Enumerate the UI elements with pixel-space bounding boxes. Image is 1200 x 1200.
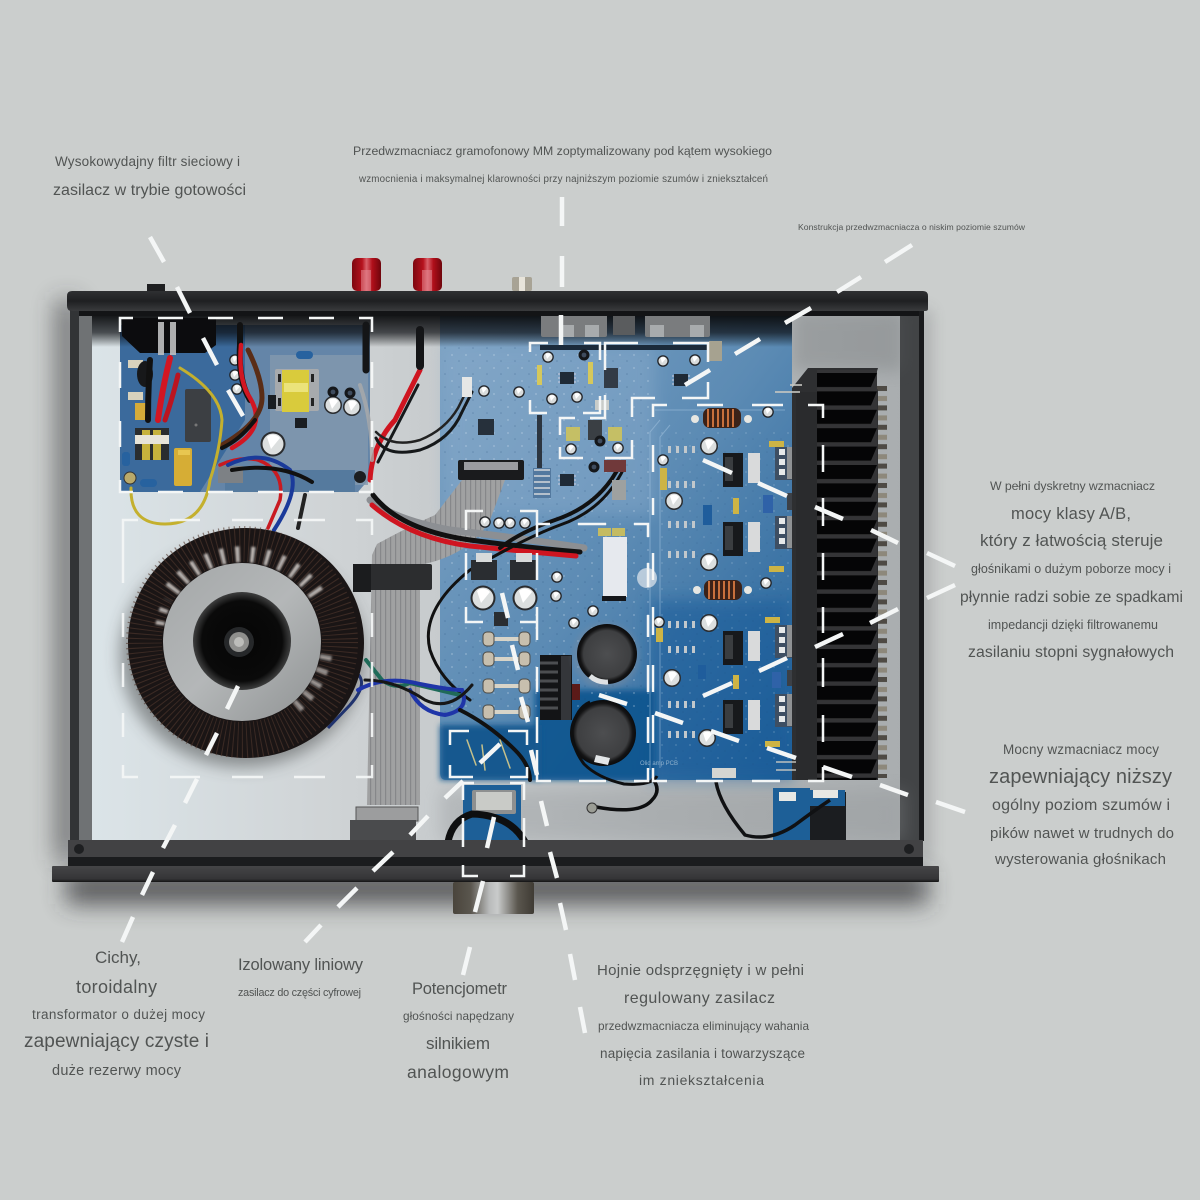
callout: class AB amp: W pełni dyskretny wzmacniacz: [990, 479, 1155, 493]
leader: low noise preamp: [685, 245, 912, 385]
callout: class AB amp: mocy klasy A/B,: [1011, 505, 1131, 523]
main wiring harness: [358, 325, 624, 780]
callout: regulated supply: regulowany zasilacz: [624, 990, 775, 1007]
leader: digital supply: [305, 744, 500, 942]
regulator heatsink: [540, 655, 580, 720]
callout: potentiometer: silnikiem: [426, 1034, 490, 1053]
power PCB components: [122, 318, 366, 487]
chassis frame bars: [52, 291, 939, 882]
callout: power amp: ogólny poziom szumów i: [992, 797, 1170, 814]
power amplifier channels: [653, 406, 800, 778]
callout: power amp: zapewniający niższy: [989, 766, 1172, 788]
small transformer: [135, 428, 169, 460]
power supply section components: [470, 528, 657, 784]
RCA socket: [512, 277, 532, 291]
box: class A/B: [653, 405, 823, 781]
callout: potentiometer: analogowym: [407, 1062, 509, 1082]
callout: power amp: wysterowania głośnikach: [994, 851, 1166, 868]
steel floor: [92, 311, 906, 843]
box: preamp regulated supply: [537, 510, 648, 781]
inductors: [691, 408, 752, 428]
volume knob: [453, 882, 534, 914]
callout: potentiometer: głośności napędzany: [403, 1009, 514, 1023]
power PCB wires: [131, 325, 312, 530]
box: phono right: [560, 343, 708, 458]
rear connectors: [147, 258, 532, 293]
callout: toroidal transformer: zapewniający czyste i: [24, 1031, 209, 1052]
callout: potentiometer: [403, 980, 514, 1082]
right rail: [919, 311, 924, 841]
leader: mains filter: [150, 237, 243, 416]
white block: [603, 537, 627, 597]
toroid centre disc: [163, 563, 321, 721]
callout: mains filter: Wysokowydajny filtr sieciowy i: [55, 154, 240, 169]
lower boards and cables: [448, 778, 846, 842]
leader: phono preamp: [561, 197, 562, 345]
IEC socket: [122, 318, 216, 353]
callout: potentiometer: Potencjometr: [412, 980, 508, 998]
callout: power amp: [989, 742, 1174, 868]
board: standby power supply PCB: [120, 325, 370, 492]
callout: regulated supply: [597, 962, 809, 1088]
rear RCA blocks: [541, 313, 710, 337]
front bar: [68, 840, 923, 865]
callout: digital supply: Izolowany liniowy: [238, 956, 364, 974]
fuses: [483, 632, 530, 719]
main yellow transformer: [275, 369, 319, 412]
callout: class AB amp: głośnikami o dużym poborze mocy i: [971, 562, 1171, 576]
preamp section components: [462, 313, 722, 529]
callout: class AB amp: zasilaniu stopni sygnałowych: [968, 644, 1174, 661]
reservoir capacitors: [570, 623, 657, 784]
relay: [185, 389, 211, 442]
callout: mains filter: zasilacz w trybie gotowości: [53, 182, 246, 199]
callout: digital supply: [238, 956, 364, 999]
yellow capacitor: [174, 448, 192, 486]
callout: regulated supply: im zniekształcenia: [639, 1072, 764, 1088]
regulators: [471, 553, 536, 580]
callout: power amp: pików nawet w trudnych do: [990, 825, 1174, 842]
callout: mains filter: [53, 154, 246, 199]
callout: regulated supply: Hojnie odsprzęgnięty i w pełni: [597, 962, 804, 979]
callout: toroidal transformer: toroidalny: [76, 977, 157, 997]
box: toroid: [123, 520, 372, 777]
callout: low noise preamp: Konstrukcja przedwzmacniacza o niskim poziomie szumów: [798, 222, 1026, 232]
callout: phono preamp: wzmocnienia i maksymalnej klarowności przy najniższym poziomie szumów i zniekształceń: [358, 174, 768, 185]
front panel: [52, 866, 939, 882]
toroidal transformer: [120, 528, 364, 767]
box: phono left: [530, 343, 600, 413]
leader: regulated supply: [502, 593, 585, 1033]
callout: regulated supply: przedwzmacniacza eliminujący wahania: [598, 1019, 809, 1033]
dashed region boxes: [120, 318, 823, 876]
box: regulators: [466, 511, 537, 622]
leader: toroid: [122, 686, 238, 942]
leader: potentiometer: [463, 817, 494, 975]
rear bar: [67, 291, 928, 311]
rear dark shading: [92, 311, 792, 347]
callout: class AB amp: płynnie radzi sobie ze spadkami: [960, 589, 1183, 606]
toroid shadow: [120, 543, 364, 767]
callout: toroidal transformer: [24, 948, 209, 1079]
small output boards: [773, 788, 846, 842]
callout: class AB amp: [960, 479, 1183, 661]
callout: power amp: Mocny wzmacniacz mocy: [1003, 742, 1159, 757]
callout: class AB amp: impedancji dzięki filtrowanemu: [988, 618, 1158, 632]
winding highlights: [160, 554, 326, 712]
potentiometer board: [448, 785, 525, 842]
leader: class AB lower: [703, 585, 955, 696]
box: standby supply: [120, 318, 372, 492]
leader lines: [122, 197, 965, 1033]
binding post right: [413, 258, 442, 291]
heatsink: [775, 368, 888, 780]
callout: regulated supply: napięcia zasilania i towarzyszące: [600, 1046, 805, 1061]
callout: digital supply: zasilacz do części cyfrowej: [238, 987, 361, 999]
heat shrink: [161, 322, 173, 355]
board: main PCB: [440, 313, 792, 780]
board: main PCB: Olid amp PCB: [640, 761, 678, 767]
box: digital supply: [450, 731, 527, 777]
binding post left: [352, 258, 381, 291]
callout: phono preamp: [353, 144, 772, 185]
box: potentiometer: [463, 783, 524, 876]
ribbon cable: [350, 460, 524, 842]
leader: power amp: [599, 695, 965, 812]
callout: toroidal transformer: Cichy,: [95, 948, 141, 967]
callout: class AB amp: który z łatwością steruje: [980, 531, 1163, 550]
amplifier drop shadow: [56, 300, 930, 904]
ground wire: [587, 778, 657, 813]
chassis: [70, 300, 922, 845]
leader: class AB upper: [703, 460, 955, 566]
callout: toroidal transformer: transformator o dużej mocy: [32, 1007, 205, 1022]
callout: toroidal transformer: duże rezerwy mocy: [52, 1063, 182, 1079]
callout: phono preamp: Przedwzmacniacz gramofonowy MM zoptymalizowany pod kątem wysokiego: [353, 144, 772, 158]
